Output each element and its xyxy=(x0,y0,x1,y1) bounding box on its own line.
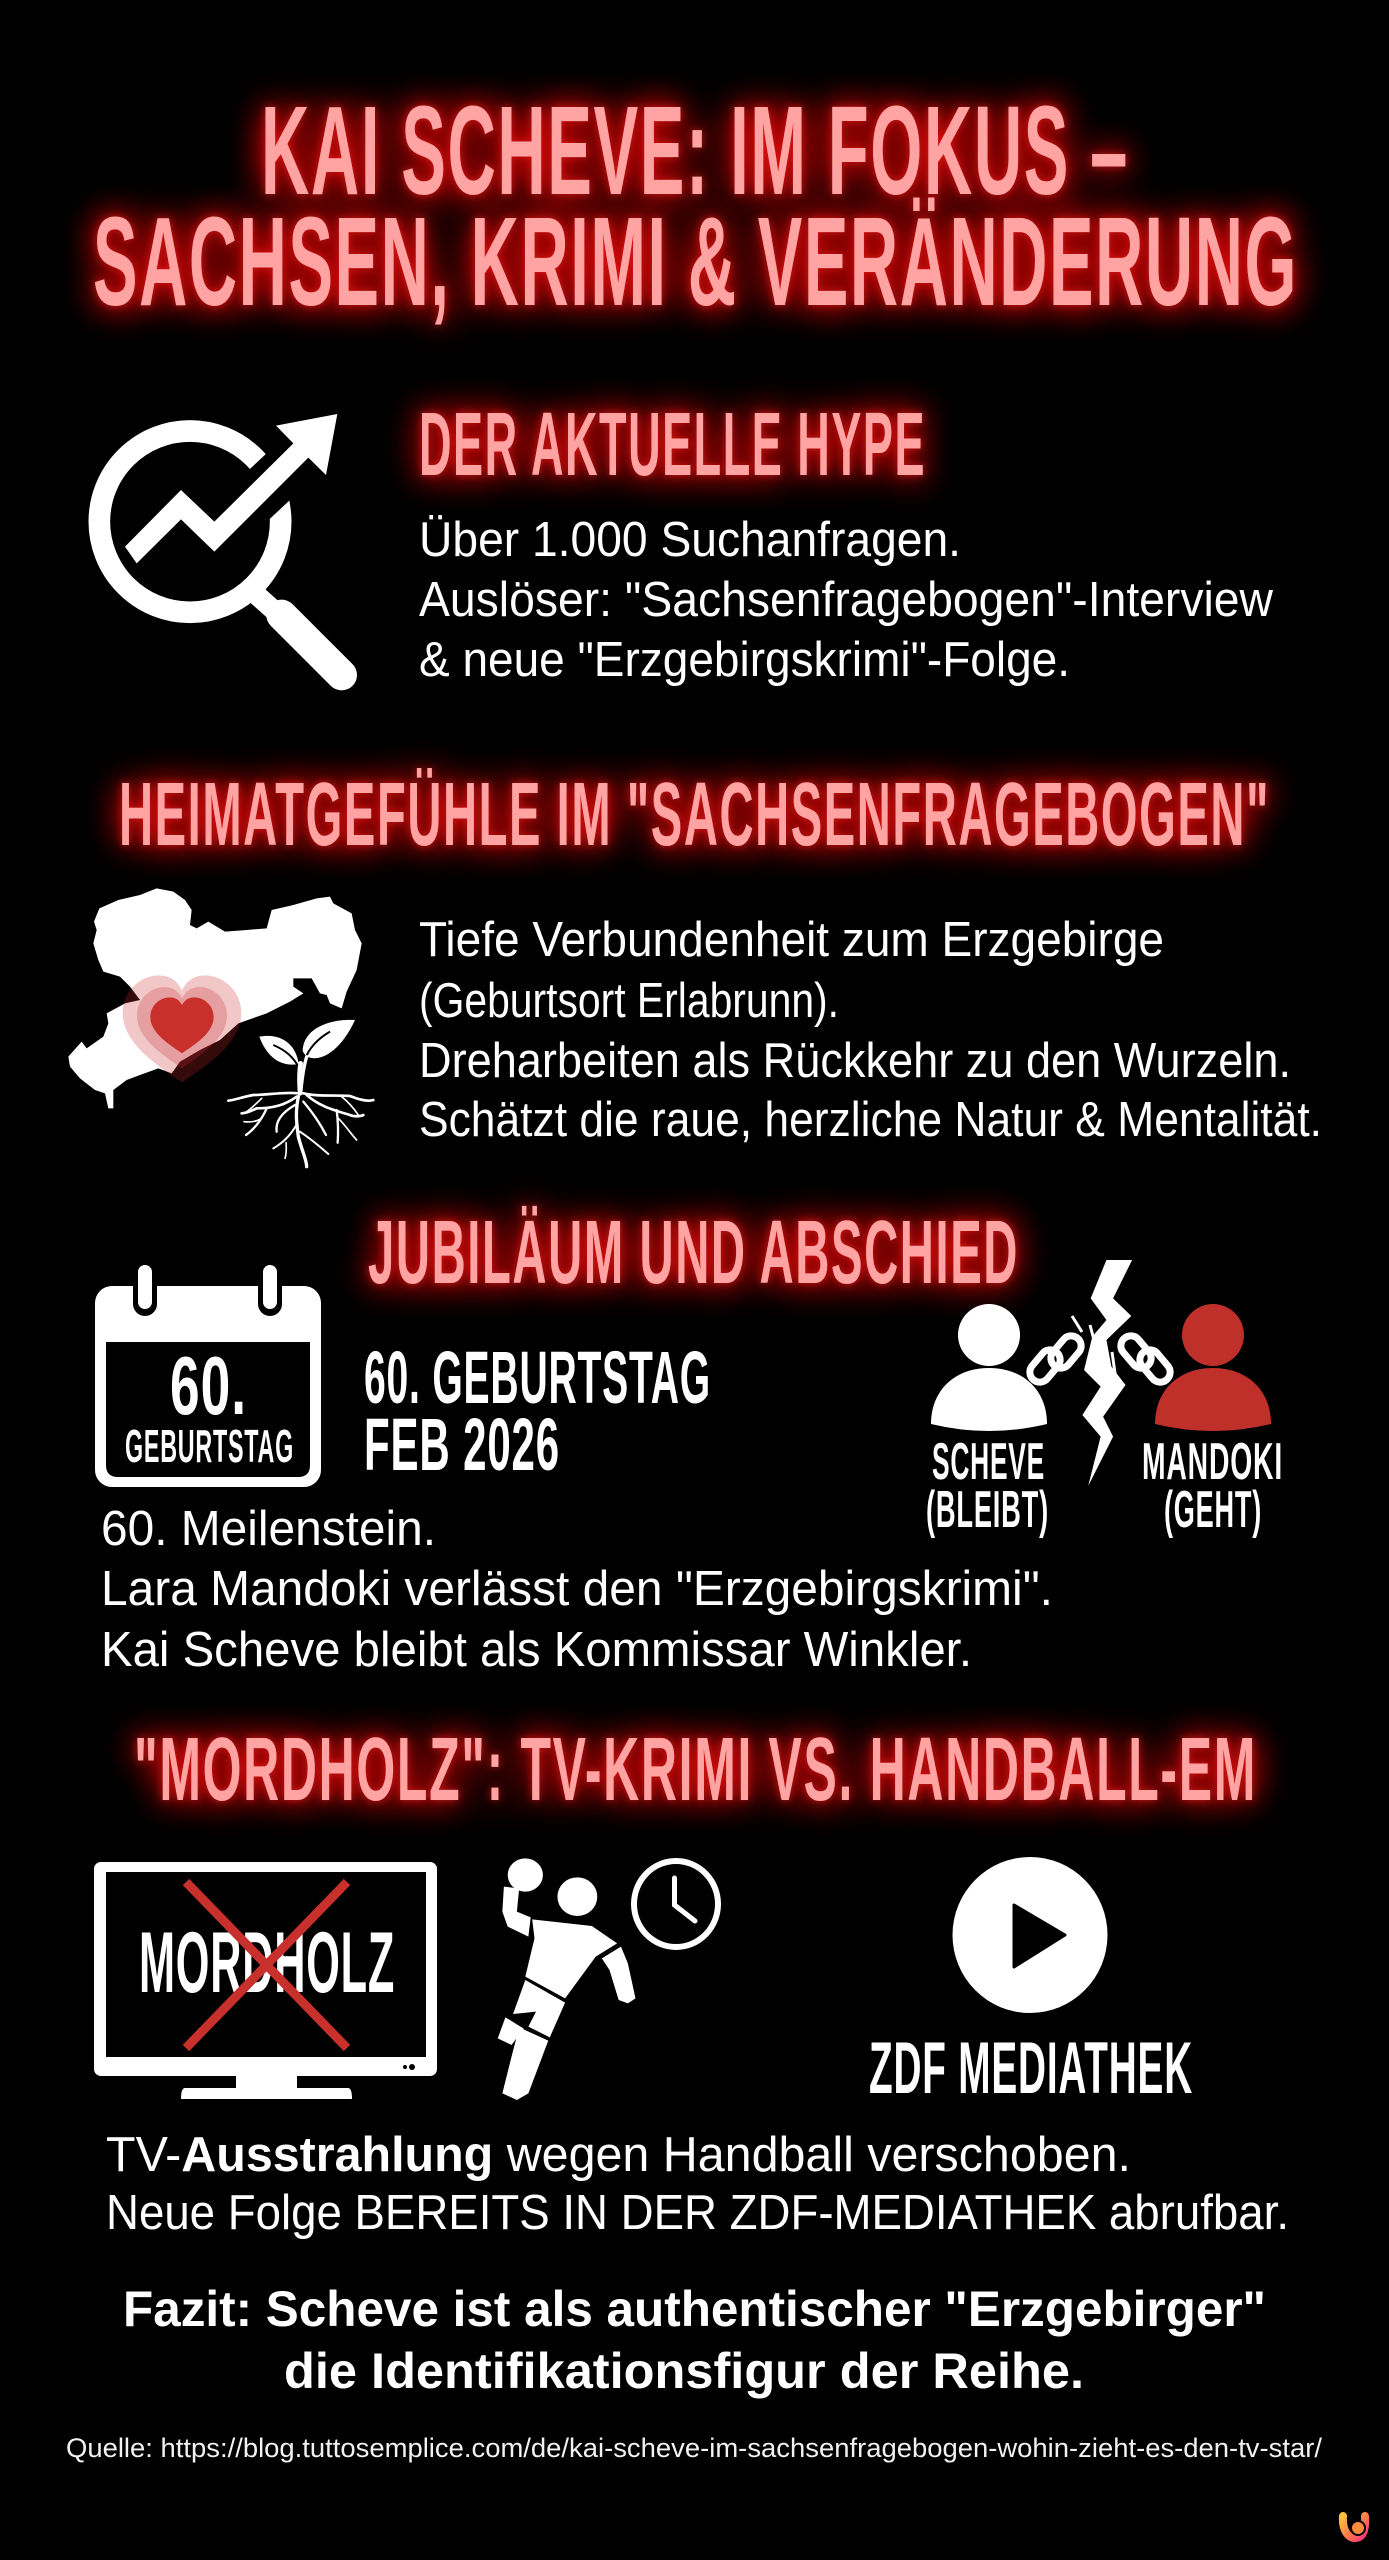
text block: mordholz: Neue Folge BEREITS IN DER ZDF-MEDIATHEK abrufbar. xyxy=(106,2186,1289,2240)
icon: plant with roots xyxy=(228,1020,373,1167)
text block: jubilaeum: 60. Meilenstein. xyxy=(101,1502,436,1556)
icon: clock xyxy=(634,1861,718,1947)
text block: heimat: Dreharbeiten als Rückkehr zu den Wurzeln. xyxy=(419,1034,1291,1088)
title xyxy=(93,80,1298,332)
text block: jubilaeum xyxy=(101,1502,1053,1677)
icon: calendar 60. Geburtstag: 60. xyxy=(170,1339,247,1432)
icon: play button xyxy=(952,1857,1108,2013)
icon: broken chain xyxy=(1026,1316,1174,1386)
icon: handball player xyxy=(498,1858,636,2100)
label: Scheve bleibt: SCHEVE xyxy=(932,1433,1045,1491)
text block: jubilaeum: Lara Mandoki verlässt den "Erzgebirgskrimi". xyxy=(101,1562,1053,1616)
text block: heimat: Schätzt die raue, herzliche Natur & Mentalität. xyxy=(419,1093,1322,1147)
text block: jubilaeum: Kai Scheve bleibt als Kommissar Winkler. xyxy=(101,1623,972,1677)
icon: magnifier with rising arrow xyxy=(99,414,342,675)
panel: mordholz xyxy=(94,1720,1289,2240)
text block: mordholz xyxy=(106,2128,1289,2240)
text block: heimat xyxy=(419,913,1322,1147)
icon: calendar 60. Geburtstag xyxy=(95,1260,321,1487)
label: Mandoki geht: (GEHT) xyxy=(1164,1481,1262,1539)
text block: heimat: (Geburtsort Erlabrunn). xyxy=(419,974,839,1028)
icon: person Scheve xyxy=(931,1304,1047,1431)
icon: tv with crossed title xyxy=(94,1862,437,2099)
text: birthday date xyxy=(364,1336,711,1486)
label: Mandoki geht xyxy=(1142,1433,1283,1539)
text block: hype: Über 1.000 Suchanfragen. xyxy=(419,513,961,567)
conclusion: die Identifikationsfigur der Reihe. xyxy=(284,2343,1084,2399)
icon: lightning bolt xyxy=(1082,1260,1132,1486)
source: Quelle: https://blog.tuttosemplice.com/de/kai-scheve-im-sachsenfragebogen-wohin-zieht-es-den-tv-star/ xyxy=(66,2433,1322,2463)
panel: heimatgefuehle xyxy=(68,765,1322,1167)
text block: heimat: Tiefe Verbundenheit zum Erzgebirge xyxy=(419,913,1164,967)
text block: mordholz: TV-Ausstrahlung wegen Handball verschoben. xyxy=(106,2128,1131,2182)
panel: der aktuelle hype xyxy=(99,395,1274,687)
conclusion: Fazit: Scheve ist als authentischer "Erzgebirger" xyxy=(123,2281,1266,2337)
icon: saxony map with heart xyxy=(68,888,362,1108)
conclusion xyxy=(123,2281,1266,2399)
icon: logo xyxy=(1343,2516,1366,2538)
text block: hype xyxy=(419,513,1274,687)
panel: jubilaeum und abschied xyxy=(95,1203,1283,1677)
text block: hype: Auslöser: "Sachsenfragebogen"-Interview xyxy=(419,573,1274,627)
icon: person Mandoki xyxy=(1155,1304,1271,1431)
label: Scheve bleibt xyxy=(926,1433,1049,1539)
text: birthday date: FEB 2026 xyxy=(364,1403,560,1486)
icon: calendar 60. Geburtstag: GEBURTSTAG xyxy=(125,1420,294,1472)
label: Scheve bleibt: (BLEIBT) xyxy=(926,1481,1049,1539)
text block: hype: & neue "Erzgebirgskrimi"-Folge. xyxy=(419,633,1070,687)
icon: tv with crossed title: MORDHOLZ xyxy=(139,1915,395,2011)
text: birthday date: 60. GEBURTSTAG xyxy=(364,1336,711,1419)
